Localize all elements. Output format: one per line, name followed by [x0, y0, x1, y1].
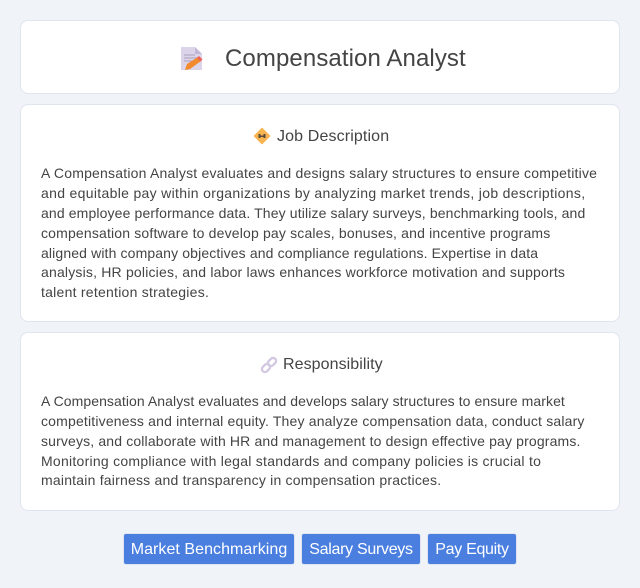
text block: responsibility: A Compensation Analyst evaluates and develops salary structures to ensure market	[41, 393, 565, 409]
text block: job description: aligned with company objectives and compliance regulations. Expertise in data	[41, 245, 538, 261]
panel: responsibility	[20, 332, 620, 511]
panel: job description	[20, 104, 620, 322]
title: Compensation Analyst	[225, 45, 466, 72]
text block: job description: compensation software to develop pay scales, bonuses, and incentive programs	[41, 225, 550, 241]
text block: job description: and employee performance data. They utilize salary surveys, benchmarking tools, and	[41, 205, 585, 221]
text block: responsibility: Monitoring compliance with legal standards and company policies is crucial to	[41, 453, 541, 469]
tag: salary surveys: Salary Surveys	[309, 541, 413, 558]
text block: responsibility	[41, 393, 585, 488]
tag: pay equity: Pay Equity	[435, 541, 509, 558]
text block: responsibility: competitiveness and internal equity. They analyze compensation data, conduct salary	[41, 413, 585, 429]
text block: job description	[41, 165, 597, 300]
text block: job description: talent retention strategies.	[41, 284, 209, 300]
text block: job description: A Compensation Analyst evaluates and designs salary structures to ensure competitive	[41, 165, 597, 181]
text block: job description: and equitable pay within organizations by analyzing market trends, job descriptions,	[41, 185, 585, 201]
text block: responsibility: maintain fairness and transparency in compensation practices.	[41, 472, 441, 488]
tag: market benchmarking: Market Benchmarking	[131, 541, 287, 558]
text block: responsibility: surveys, and collaborate with HR and management to design effective pay programs.	[41, 433, 581, 449]
text block: job description: analysis, HR policies, and labor laws enhances workforce motivation and supports	[41, 264, 565, 280]
icon: document with pencil	[181, 47, 202, 70]
tag: market benchmarking	[124, 534, 294, 564]
tag: salary surveys	[302, 534, 420, 564]
heading: responsibility: Responsibility	[283, 356, 383, 373]
header card	[20, 20, 620, 94]
tag: pay equity	[428, 534, 516, 564]
icon: chain link	[260, 356, 278, 374]
icon: diamond sign	[254, 128, 270, 144]
heading: job description: Job Description	[277, 128, 389, 145]
